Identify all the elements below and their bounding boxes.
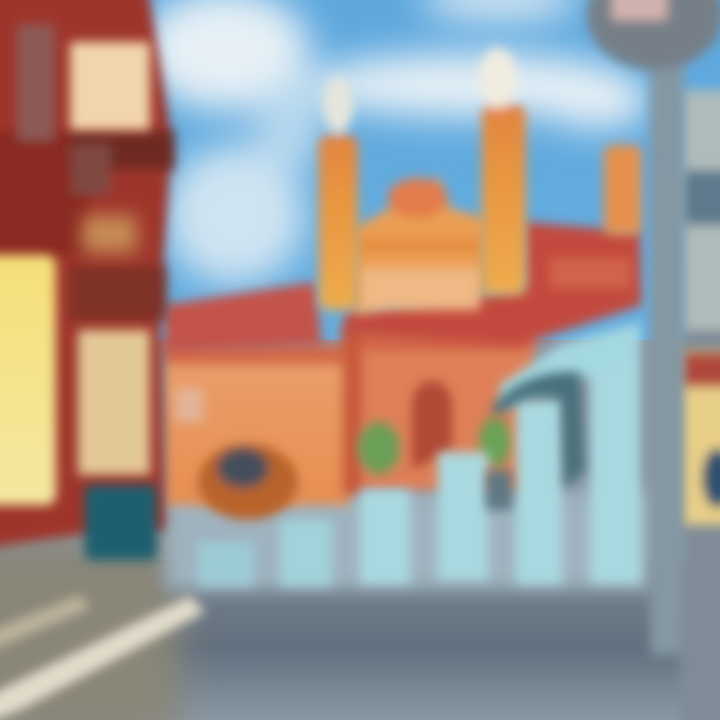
ascending pale blue columns <box>198 322 640 586</box>
ground: pavement <box>0 540 720 720</box>
cream upper window <box>70 42 150 130</box>
teal bin <box>85 485 157 560</box>
white diagonal kerb stripes <box>0 595 205 720</box>
pale plinth behind columns <box>165 490 655 590</box>
beige shop window <box>78 330 150 475</box>
right pale building <box>680 90 720 720</box>
grey lamp post <box>650 60 684 655</box>
colourful sign at right edge <box>678 350 720 525</box>
clouds <box>140 0 650 285</box>
historic building: red roof <box>165 282 322 352</box>
glowing yellow shop window <box>0 255 56 505</box>
historic building: lower wall <box>165 325 535 505</box>
historic building: central facade <box>355 178 485 315</box>
small tan window <box>82 215 137 253</box>
historic building: left tower <box>319 77 358 310</box>
round window with dark centre <box>198 444 298 520</box>
dark arch over columns <box>486 372 584 510</box>
arched doorway <box>412 381 452 470</box>
green bushes <box>358 417 511 474</box>
left red brick building <box>0 0 175 550</box>
historic building: right tower <box>604 145 642 235</box>
historic building: centre tower <box>479 48 526 295</box>
sky <box>0 0 720 340</box>
pale lamp on wall <box>175 388 203 422</box>
street sign at top right <box>587 0 720 70</box>
historic building: right red wing <box>345 222 642 345</box>
